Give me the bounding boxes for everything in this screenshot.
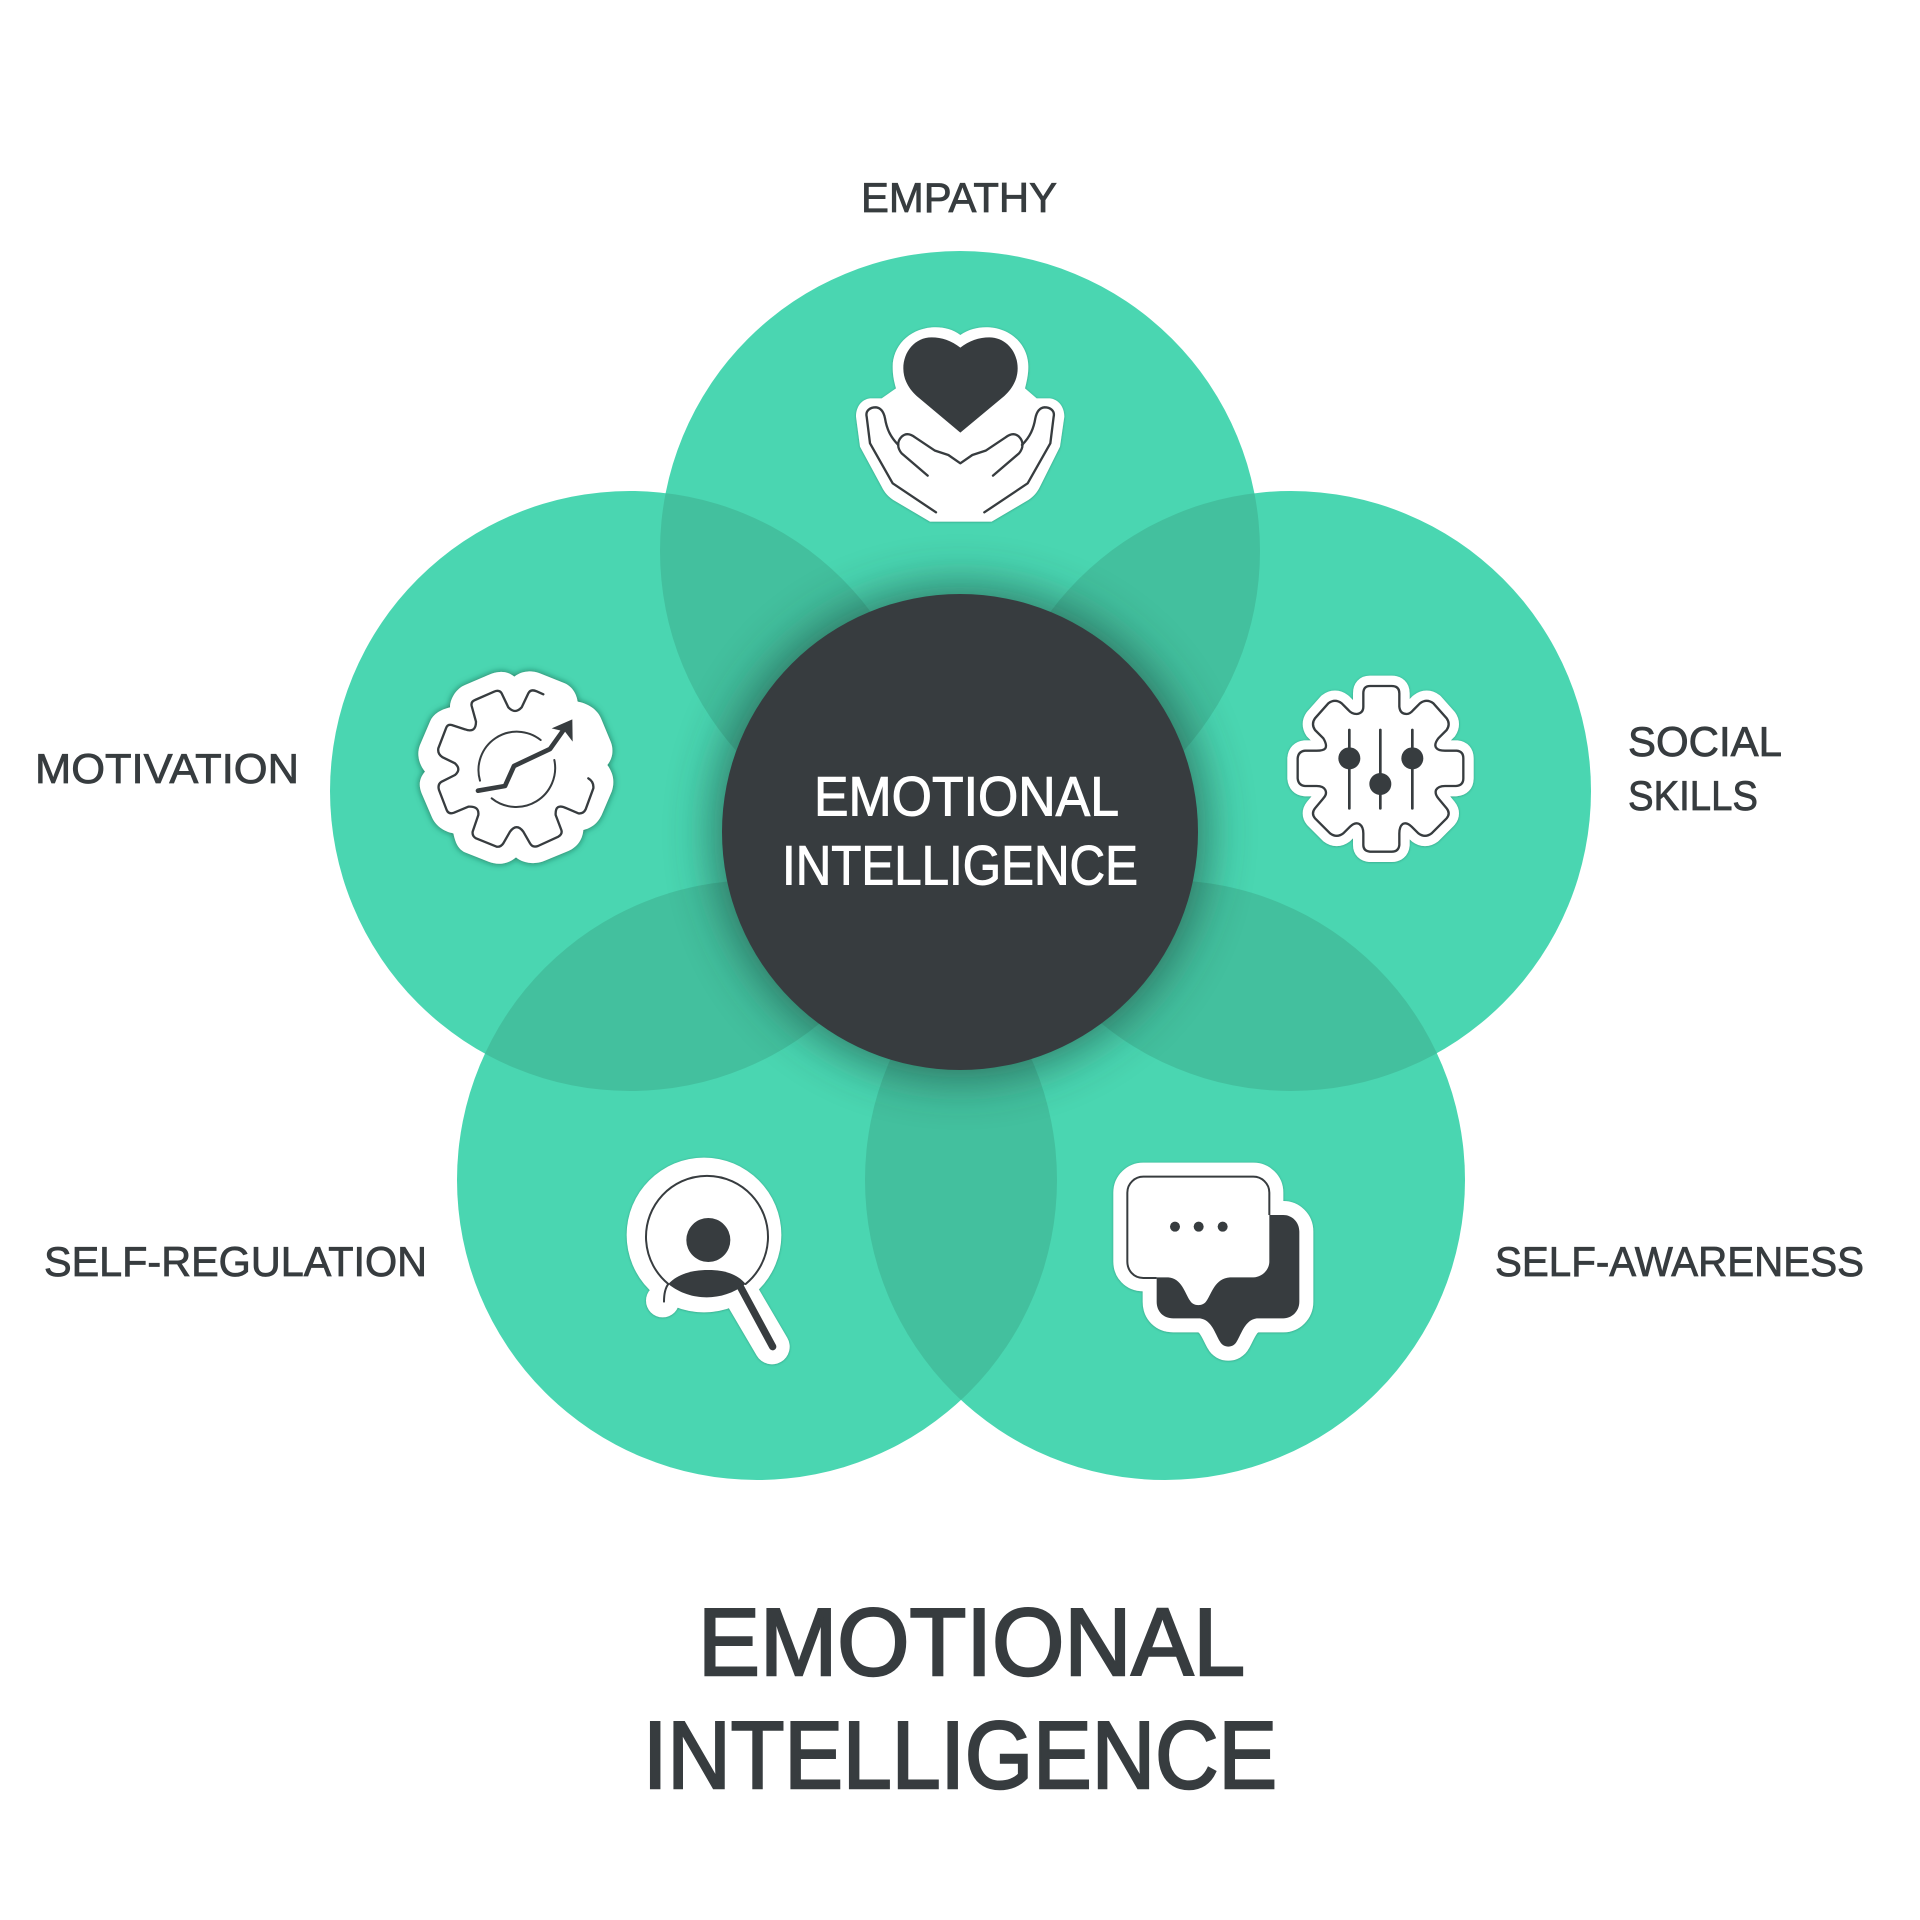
label: social skills [1628,718,1782,819]
overlap: social skills and self-awareness [1102,882,1437,1091]
white front bubble [1127,1177,1269,1305]
label: empathy: EMPATHY [861,174,1057,221]
title [643,1589,1277,1809]
venn diagram circles [330,251,1591,1480]
icon: speech bubbles [1127,1177,1299,1347]
circle: self-awareness [865,880,1465,1480]
dark back bubble [1157,1215,1299,1347]
center circle [722,594,1198,1070]
circle: social skills [991,491,1591,1091]
overlap: self-regulation and self-awareness [865,1059,1057,1400]
circle: empathy [660,251,1260,851]
label: self-awareness: SELF-AWARENESS [1495,1238,1864,1285]
center label: EMOTIONAL [814,764,1119,828]
title: EMOTIONAL [698,1589,1245,1696]
center circle shadow [714,586,1206,1078]
circle: motivation [330,491,930,1091]
center label [782,764,1138,896]
label: social skills: SOCIAL [1628,718,1782,765]
icon: gear with rising arrow [418,671,613,864]
overlap: empathy and motivation [660,493,870,750]
overlap: empathy and social skills [1050,493,1260,750]
icon: heart in hands [856,327,1064,522]
circle: self-regulation [457,880,1057,1480]
label: motivation: MOTIVATION [35,745,299,792]
overlap: motivation and self-regulation [485,882,819,1091]
title: INTELLIGENCE [643,1702,1277,1809]
icon: gear with sliders [1298,686,1463,852]
label: social skills: SKILLS [1628,772,1758,819]
icon: magnifying glass with person [627,1158,781,1347]
label: self-regulation: SELF-REGULATION [44,1238,427,1285]
center label: INTELLIGENCE [782,834,1138,896]
